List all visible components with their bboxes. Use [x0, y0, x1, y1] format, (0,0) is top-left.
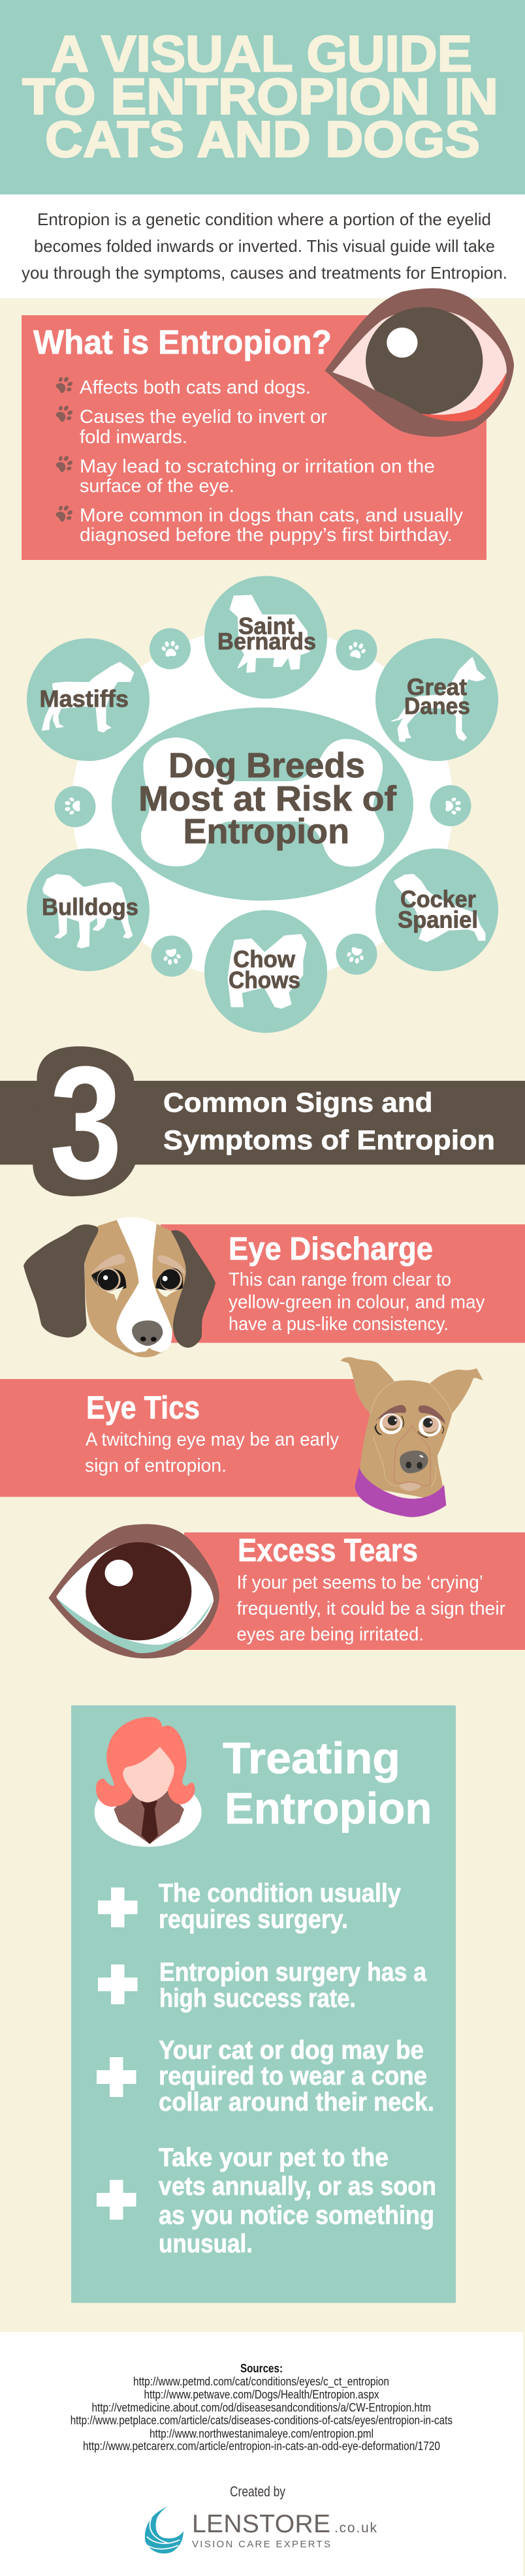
treatment item: requires surgery: requires surgery.: [159, 1905, 348, 1934]
heading: treating entropion: [223, 1733, 432, 1833]
breed: mastiffs: [27, 638, 150, 761]
title: A VISUAL GUIDE: [51, 25, 472, 82]
heading: signs and symptoms: Common Signs and: [163, 1087, 432, 1117]
title: [22, 25, 498, 168]
heading: treating entropion: Entropion: [225, 1784, 432, 1833]
footer: [0, 2332, 523, 2576]
breed: saint bernards: Bernards: [217, 628, 316, 655]
breed: chow chows: [204, 910, 327, 1032]
logo: lenstore: LENSTORE: [192, 2510, 330, 2538]
sources: http://www.petcarerx.com/article/entropion-in-cats-an-odd-eye-deformation/1720: [83, 2440, 440, 2453]
icon: lenstore swoosh: [145, 2507, 183, 2554]
text: eye tics description: A twitching eye may be an early: [86, 1429, 339, 1450]
text: eye discharge description: have a pus-like consistency.: [229, 1314, 449, 1335]
panel: what is entropion: [22, 288, 514, 560]
panel: excess tears: [48, 1524, 525, 1658]
text: eye tics description: sign of entropion.: [85, 1455, 227, 1476]
panel: treating entropion: [71, 1705, 456, 2303]
treatment item: annual vet visit: [97, 2143, 436, 2258]
treatment item: cone collar: required to wear a cone: [159, 2062, 427, 2090]
breed: bulldogs: Bulldogs: [42, 893, 138, 920]
heading: treating entropion: Treating: [223, 1733, 400, 1783]
bullet: more common in dogs: More common in dogs than cats, and usually: [80, 505, 464, 526]
heading: what is entropion: What is Entropion?: [33, 324, 332, 362]
breed: chow chows: Chow: [233, 946, 296, 972]
bullet: causes the eyelid: Causes the eyelid to invert or: [80, 407, 327, 427]
breed: bulldogs: [27, 848, 150, 971]
breed: great danes: [375, 638, 498, 761]
breed: cocker spaniel: Cocker: [400, 886, 476, 912]
central bone ellipse: Entropion: [183, 812, 349, 851]
treatment item: requires surgery: [98, 1879, 402, 1934]
bullet: causes the eyelid: fold inwards.: [80, 427, 187, 448]
logo: lenstore: .co.uk: [334, 2521, 377, 2536]
heading: signs and symptoms: Symptoms of Entropion: [163, 1125, 495, 1155]
icon: vet woman: [95, 1717, 202, 1847]
bullet: affects both: Affects both cats and dogs.: [80, 377, 311, 398]
icon: dog head with collar: [341, 1357, 483, 1517]
treatment item: cone collar: [97, 2036, 434, 2117]
heading: signs and symptoms: [163, 1087, 495, 1155]
icon: paw circle top right: [336, 629, 377, 671]
text: excess tears description: [236, 1572, 505, 1645]
bullet: scratching: surface of the eye.: [80, 476, 234, 497]
treatment item: annual vet visit: vets annually, or as soon: [159, 2172, 436, 2201]
intro text block: [0, 194, 525, 298]
title banner: [0, 0, 525, 194]
numeral 3: 3: [50, 1033, 122, 1213]
treatment item: cone collar: Your cat or dog may be: [159, 2036, 424, 2065]
breed: chow chows: Chows: [229, 967, 300, 993]
text: excess tears description: frequently, it could be a sign their: [236, 1598, 505, 1619]
intro text block: becomes folded inwards or inverted. This visual guide will take: [34, 236, 495, 256]
text: excess tears description: If your pet seems to be ‘crying’: [236, 1572, 483, 1593]
treatment item: cone collar: collar around their neck.: [159, 2088, 434, 2117]
breed: cocker spaniel: [375, 848, 498, 971]
icon: bone: [141, 737, 384, 867]
icon: paw circle bottom left: [151, 936, 192, 976]
title: CATS AND DOGS: [45, 110, 480, 168]
text: excess tears description: eyes are being irritated.: [236, 1624, 424, 1645]
bullet: scratching: [53, 452, 435, 497]
intro text block: you through the symptoms, causes and treatments for Entropion.: [22, 263, 507, 283]
treatment item: annual vet visit: unusual.: [159, 2229, 253, 2258]
sources: http://www.petmd.com/cat/conditions/eyes/c_ct_entropion: [133, 2375, 389, 2389]
sources: http://vetmedicine.about.com/od/diseasesandconditions/a/CW-Entropion.htm: [91, 2401, 431, 2414]
icon: beagle head: [24, 1217, 215, 1358]
breed: great danes: Danes: [404, 692, 470, 719]
icon: paw circle bottom right: [336, 933, 377, 975]
heading: eye tics: Eye Tics: [86, 1390, 200, 1425]
treatment item: success rate: Entropion surgery has a: [159, 1958, 427, 1987]
central bone ellipse: Dog Breeds: [168, 746, 365, 785]
treatment item: annual vet visit: Take your pet to the: [159, 2143, 389, 2172]
breed: great danes: Great: [407, 674, 467, 700]
heading: eye discharge: Eye Discharge: [229, 1232, 433, 1267]
logo: lenstore: VISION CARE EXPERTS: [192, 2539, 330, 2550]
created by: Created by: [230, 2483, 285, 2500]
treatment item: requires surgery: The condition usually: [159, 1879, 402, 1908]
panel: eye tics: [0, 1357, 483, 1517]
icon: inflamed eye: [325, 288, 514, 437]
sources: http://www.petwave.com/Dogs/Health/Entropion.aspx: [144, 2388, 379, 2401]
breed: cocker spaniel: Spaniel: [398, 906, 478, 933]
text: eye discharge description: [229, 1269, 485, 1335]
panel: dog breeds most at risk: [27, 576, 498, 1032]
icon: paw circle left: [55, 786, 95, 828]
bullet: more common in dogs: diagnosed before the puppy’s first birthday.: [80, 525, 453, 546]
text: eye discharge description: This can range from clear to: [229, 1269, 451, 1290]
sources: [71, 2362, 453, 2453]
text: eye tics description: [85, 1429, 339, 1476]
icon: paw circle top left: [150, 628, 191, 670]
sources: http://www.petplace.com/article/cats/diseases-conditions-of-cats/eyes/entropion-in-cats: [71, 2413, 453, 2427]
icon: teary eye: [48, 1524, 219, 1658]
title: TO ENTROPION IN: [22, 68, 498, 125]
sources: Sources:: [240, 2362, 283, 2375]
bullet: more common in dogs: [53, 501, 464, 546]
panel: eye discharge: [24, 1217, 525, 1358]
banner: 3 common signs: [0, 1033, 525, 1213]
logo: lenstore: [145, 2507, 377, 2554]
central bone ellipse: Most at Risk of: [138, 779, 397, 818]
treatment item: success rate: high success rate.: [159, 1984, 356, 2013]
bullet: scratching: May lead to scratching or irritation on the: [80, 456, 435, 477]
icon: paw circle right: [430, 785, 471, 826]
intro text block: Entropion is a genetic condition where a portion of the eyelid: [37, 209, 491, 229]
heading: excess tears: Excess Tears: [238, 1533, 418, 1568]
treatment item: success rate: [98, 1958, 427, 2013]
breed: mastiffs: Mastiffs: [39, 685, 129, 712]
breed: saint bernards: [204, 576, 327, 698]
central bone ellipse: [112, 707, 413, 901]
sources: http://www.northwestanimaleye.com/entropion.pml: [150, 2427, 374, 2440]
treatment item: annual vet visit: as you notice something: [159, 2201, 434, 2229]
text: eye discharge description: yellow-green in colour, and may: [229, 1292, 485, 1313]
breed: saint bernards: Saint: [238, 612, 294, 640]
bullet: causes the eyelid: [53, 401, 327, 448]
